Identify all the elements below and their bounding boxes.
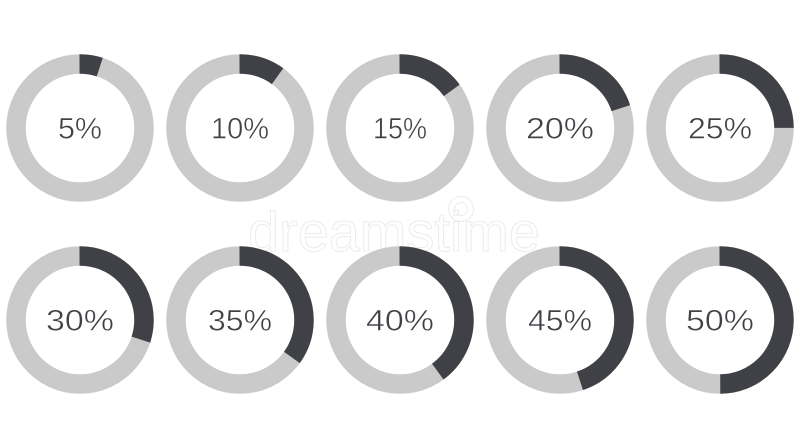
donut: 25%: 25%: [688, 112, 752, 146]
donut: 5%: [16, 64, 144, 192]
donut: 20%: [496, 64, 624, 192]
donut: 40%: [336, 256, 464, 384]
donut: 50%: [656, 256, 784, 384]
donut: 10%: 10%: [211, 112, 269, 146]
donut: 20%: 20%: [526, 112, 594, 146]
donut: 10%: [176, 64, 304, 192]
donut: 15%: [336, 64, 464, 192]
donut: 45%: 45%: [528, 304, 592, 338]
donut: 50%: 50%: [686, 304, 754, 338]
donut: 5%: 5%: [58, 112, 102, 146]
donut: 35%: 35%: [208, 304, 272, 338]
donut: 45%: [496, 256, 624, 384]
donut: 15%: 15%: [373, 112, 427, 146]
donut: 30%: 30%: [46, 304, 114, 338]
watermark: dreamstime: [248, 200, 540, 263]
donut: 40%: 40%: [366, 304, 434, 338]
donut: 25%: [656, 64, 784, 192]
donut: 35%: [176, 256, 304, 384]
donut: 30%: [16, 256, 144, 384]
